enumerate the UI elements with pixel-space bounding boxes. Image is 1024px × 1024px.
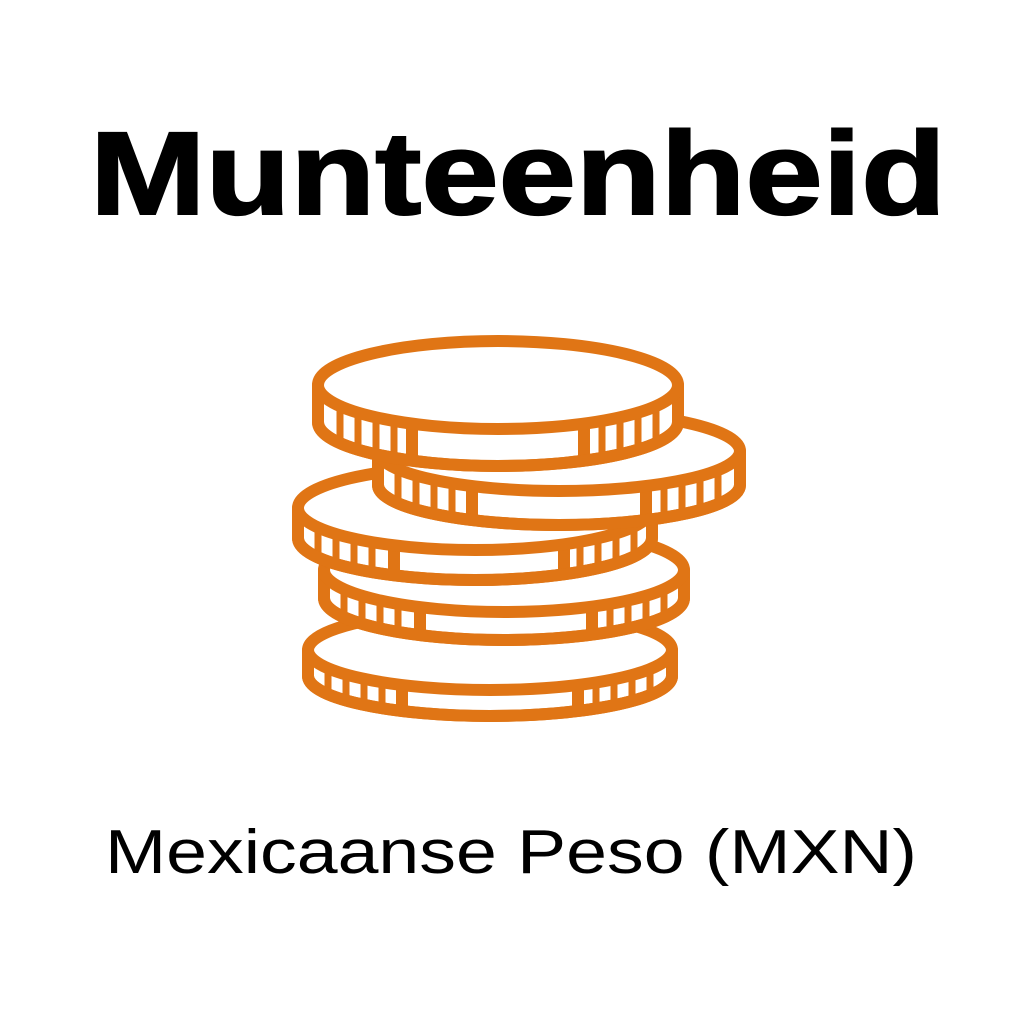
icon: coin stack (298, 341, 740, 730)
coin 3 (298, 466, 652, 590)
coin 4 (318, 542, 690, 646)
title: Munteenheid (90, 108, 946, 240)
coin 5 (bottom) (302, 622, 678, 722)
coin 1 (top) (318, 341, 678, 470)
subtitle: Mexicaanse Peso (MXN) (105, 818, 917, 887)
coin 2 (378, 411, 740, 530)
